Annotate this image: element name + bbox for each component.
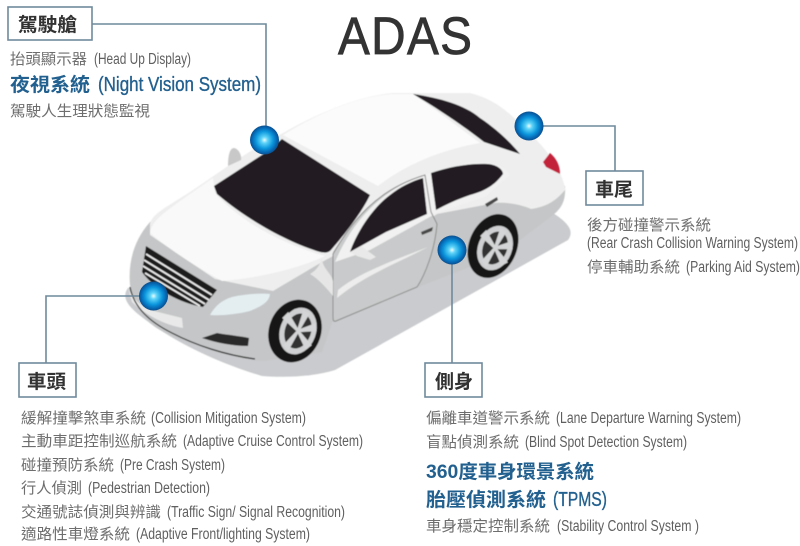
heading box: rear (586, 171, 643, 205)
item: pedestrian detection (21, 480, 210, 497)
item: lane departure (426, 409, 741, 427)
item: traffic sign (21, 503, 345, 521)
item: blind spot: (Blind Spot Detection System) (525, 434, 687, 451)
heading box: side (425, 363, 482, 397)
item: adaptive lighting (21, 525, 310, 543)
front bumper highlight (128, 288, 183, 328)
panel: side (425, 363, 741, 535)
heading box: rear: 車尾 (595, 179, 633, 201)
item: tpms: (TPMS) (553, 489, 607, 511)
item: pedestrian detection: (Pedestrian Detection) (88, 480, 210, 497)
item: traffic sign: 交通號誌偵測與辨識 (21, 503, 161, 521)
heading box: front (19, 363, 76, 397)
door streak (337, 247, 428, 298)
item: tpms: 胎壓偵測系統 (426, 488, 546, 511)
heading box: cockpit: 駕駛艙 (18, 13, 77, 36)
item: collision mitigation: 緩解撞擊煞車系統 (21, 409, 146, 427)
marker: side (438, 236, 466, 264)
car illustration (125, 93, 571, 377)
rear window (413, 94, 520, 154)
item: parking aid: 停車輔助系統 (587, 259, 680, 276)
item: collision mitigation (21, 409, 306, 427)
grille (142, 246, 217, 307)
connector lines (46, 24, 615, 363)
item: adaptive lighting: (Adaptive Front/lighting System) (136, 526, 310, 543)
headlight (210, 294, 270, 315)
front door panel (333, 175, 437, 321)
heading box: front: 車頭 (27, 371, 66, 393)
front wheel (260, 292, 330, 370)
ground shadow (125, 213, 571, 377)
item: stability control: (Stability Control System ) (557, 518, 699, 535)
item: pre crash: 碰撞預防系統 (21, 456, 114, 474)
item: blind spot (426, 434, 687, 451)
panel: front (19, 363, 363, 543)
item: pre crash (21, 456, 225, 474)
item: parking aid (587, 259, 800, 276)
item: lane departure: 偏離車道警示系統 (426, 409, 550, 427)
item: rear crash warning: 後方碰撞警示系統 (587, 216, 711, 234)
item: head up display (10, 51, 191, 68)
item: collision mitigation: (Collision Mitigation System) (151, 410, 306, 427)
item: blind spot: 盲點偵測系統 (426, 434, 519, 451)
item: head up display: 抬頭顯示器 (10, 51, 87, 68)
wing mirror (228, 148, 241, 166)
door handles (421, 197, 498, 235)
air intake (202, 333, 249, 346)
item: pedestrian detection: 行人偵測 (21, 480, 82, 497)
hood (150, 178, 325, 281)
item: adaptive cruise (21, 433, 363, 450)
item: adaptive cruise: 主動車距控制巡航系統 (21, 433, 177, 450)
windshield (214, 139, 370, 253)
item: traffic sign: (Traffic Sign/ Signal Recognition) (167, 504, 345, 521)
rear wheel (458, 206, 528, 286)
marker: rear (514, 112, 544, 140)
door outline (333, 175, 437, 321)
item: driver monitoring: 駕駛人生理狀態監視 (10, 103, 150, 120)
roof highlight (283, 94, 480, 186)
front door window (350, 178, 427, 252)
tail light (543, 153, 560, 174)
heading box: cockpit (8, 7, 92, 40)
rear side window (431, 164, 503, 210)
item: 360 view: 360度車身環景系統 (426, 460, 594, 483)
item: stability control: 車身穩定控制系統 (426, 518, 550, 535)
item: stability control (426, 518, 699, 535)
body side window band (335, 162, 510, 262)
front fender highlight (310, 258, 333, 296)
item: tpms (426, 488, 607, 511)
item: head up display: (Head Up Display) (94, 51, 191, 68)
heading box: side: 側身 (435, 371, 473, 393)
item: night vision: (Night Vision System) (98, 74, 261, 96)
item: pre crash: (Pre Crash System) (120, 457, 225, 474)
item: rear crash warning (587, 216, 798, 252)
item: adaptive cruise: (Adaptive Cruise Control System) (183, 433, 363, 450)
item: night vision: 夜視系統 (10, 73, 90, 96)
car body upper (150, 93, 565, 291)
side mirror (350, 246, 376, 260)
item: adaptive lighting: 適路性車燈系統 (21, 525, 130, 543)
bumper outline (130, 287, 255, 359)
marker: front (139, 282, 168, 310)
title: ADAS (338, 6, 473, 66)
item: night vision (10, 73, 261, 96)
panel: rear (586, 171, 800, 276)
item: lane departure: (Lane Departure Warning System) (556, 410, 741, 427)
car body lower (130, 160, 565, 361)
marker: cockpit (250, 126, 279, 154)
panel: cockpit (8, 7, 261, 120)
